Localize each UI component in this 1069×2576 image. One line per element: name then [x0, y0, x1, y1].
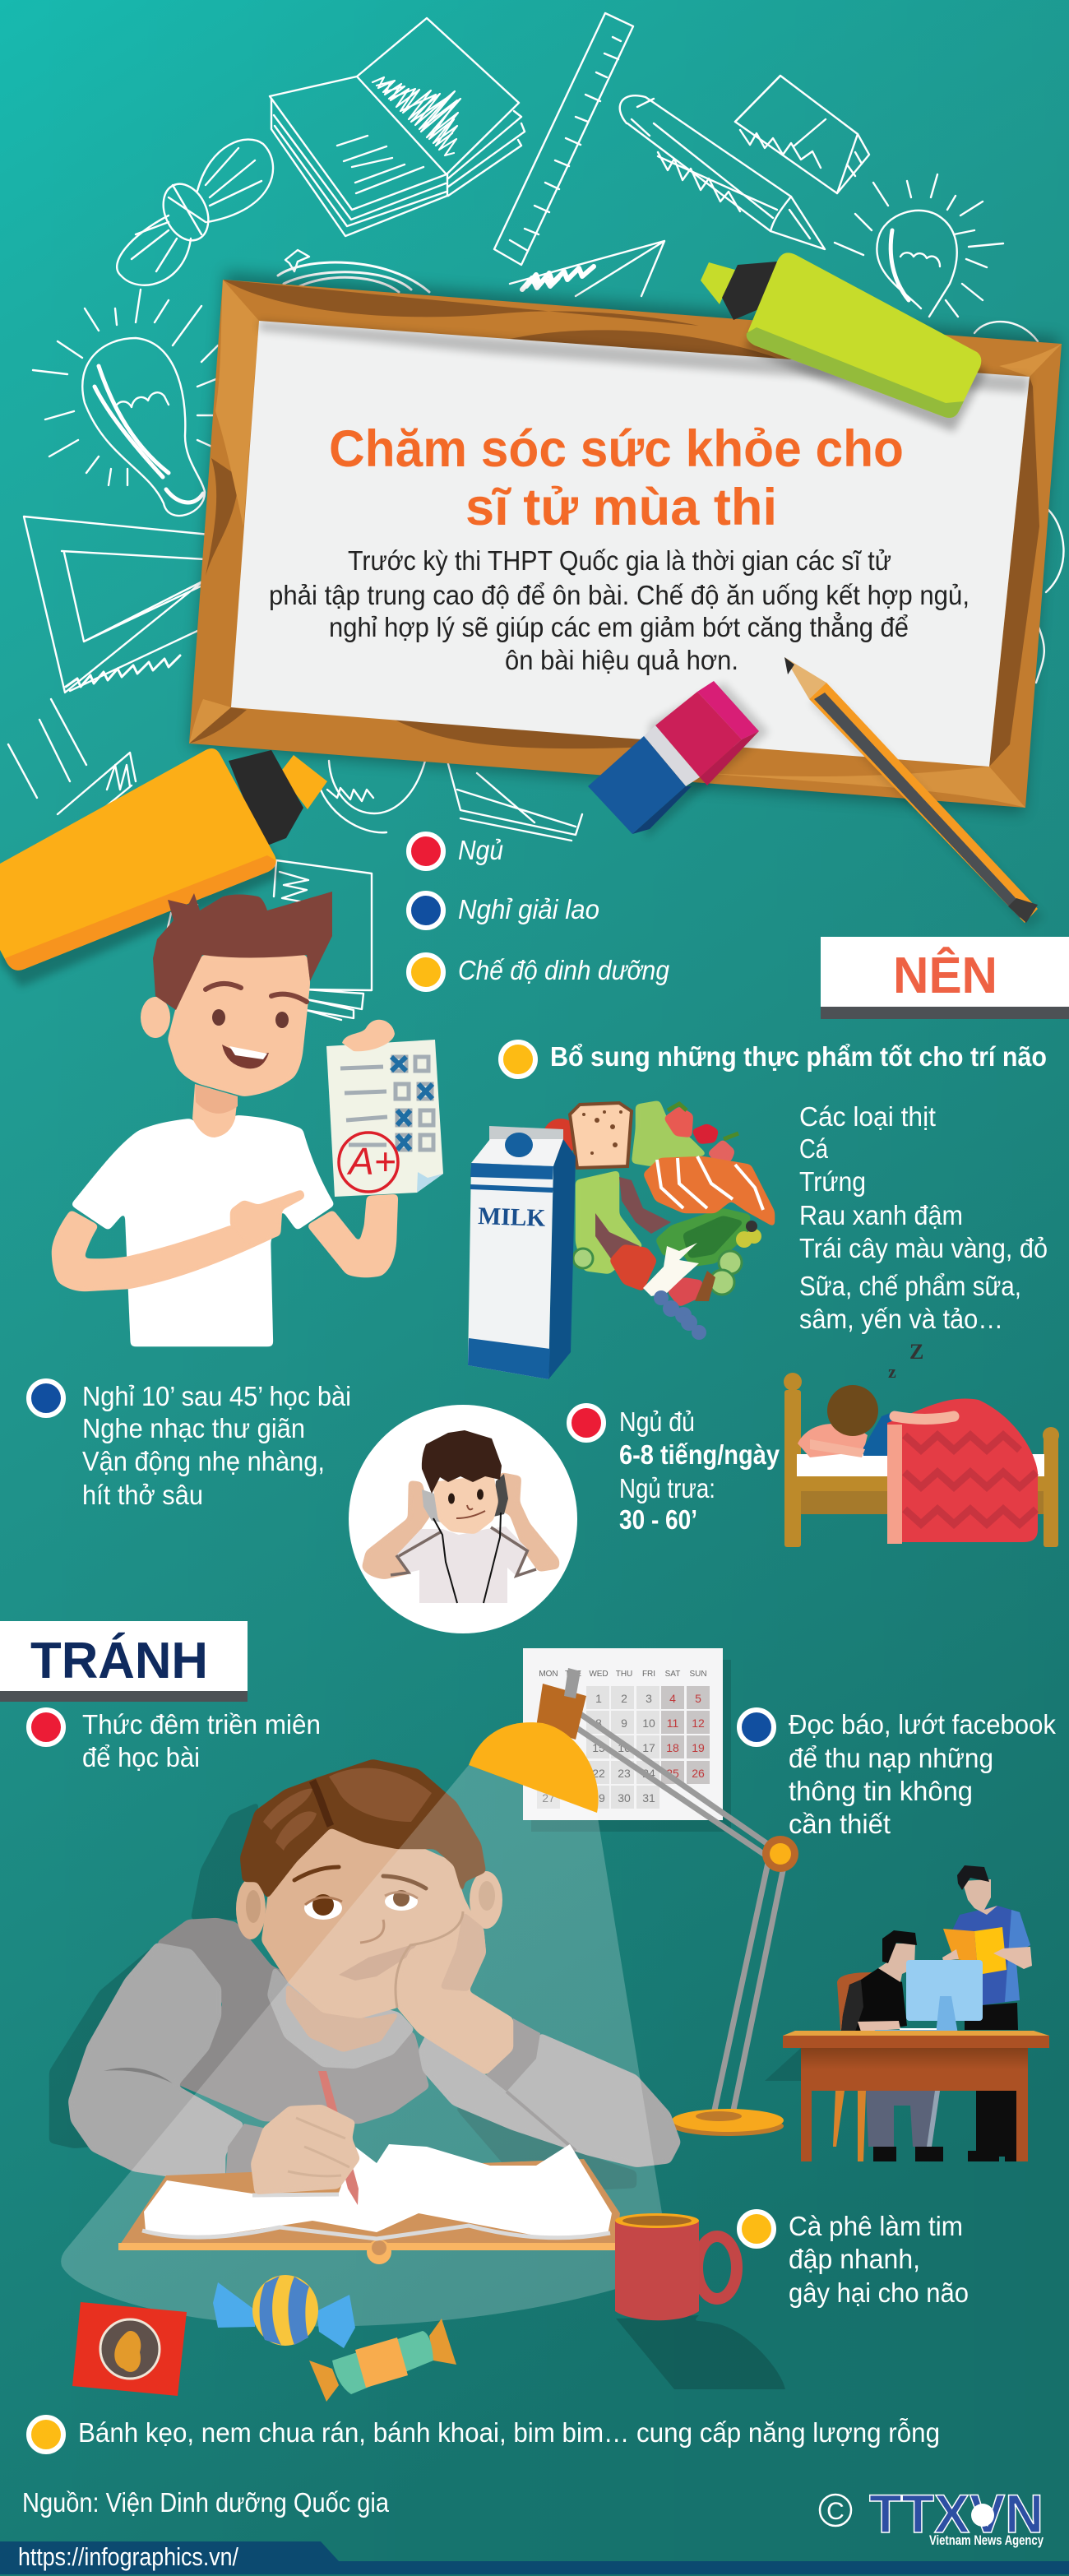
legend	[409, 834, 670, 989]
blueberries	[654, 1290, 706, 1340]
calendar: 2	[621, 1692, 627, 1705]
empty-energy dot	[29, 2417, 63, 2452]
sleep text: Ngủ đủ	[619, 1406, 695, 1437]
doodle: set square	[24, 517, 210, 693]
bread	[570, 1103, 632, 1168]
ears	[236, 1879, 266, 1939]
heading: NÊN	[821, 937, 1069, 1019]
light cone	[61, 1765, 662, 2327]
legend dot: nutrition	[409, 955, 443, 989]
hair	[422, 1430, 502, 1494]
intro text	[269, 545, 970, 675]
right arm	[419, 2033, 681, 2167]
test paper	[326, 1040, 443, 1197]
board	[231, 321, 1030, 767]
face	[261, 1818, 486, 2018]
mattress	[797, 1454, 1044, 1476]
right cuff	[486, 2018, 540, 2092]
doodle: ruler	[494, 13, 633, 265]
calendar: FRI	[642, 1670, 655, 1679]
all-nighter dot	[29, 1710, 63, 1744]
calendar: 18	[666, 1741, 679, 1754]
pillow	[798, 1424, 868, 1457]
mouth	[339, 1943, 419, 1981]
wooden frame	[189, 280, 1062, 808]
illustration: tired student	[49, 1759, 681, 2264]
legend dot: sleep	[409, 834, 443, 869]
coffee text	[789, 2211, 969, 2308]
z large: Z	[909, 1340, 923, 1364]
desk book cover	[118, 2159, 620, 2247]
illustration: sleeping student in bed	[784, 1361, 1059, 1547]
doodle: lower left doodles	[8, 699, 425, 832]
coffee text: gây hại cho não	[789, 2277, 969, 2308]
calendar: 10	[642, 1717, 655, 1730]
nutrition dot	[501, 1042, 535, 1077]
intro text: ôn bài hiệu quả hơn.	[505, 645, 738, 675]
coffee text: đập nhanh,	[789, 2244, 920, 2274]
sleep dot	[569, 1406, 604, 1440]
intro text: Trước kỳ thi THPT Quốc gia là thời gian các sĩ tử	[348, 545, 891, 576]
lower arm	[810, 1439, 865, 1457]
calendar: 4	[669, 1692, 676, 1705]
brows	[294, 1867, 426, 1888]
illustration: food heap	[543, 1100, 775, 1340]
all-nighter text	[82, 1709, 321, 1772]
title: sĩ tử mùa thi	[465, 479, 777, 536]
empty-energy text: Bánh kẹo, nem chua rán, bánh khoai, bim bim… cung cấp năng lượng rỗng	[78, 2417, 940, 2448]
neck	[286, 1983, 400, 2052]
calendar: 25	[666, 1767, 679, 1780]
sleep text: 30 - 60’	[619, 1504, 697, 1535]
sleep text	[619, 1406, 780, 1535]
legend label: rest: Nghỉ giải lao	[458, 894, 599, 924]
legend label: sleep: Ngủ	[458, 835, 503, 865]
vegetables	[655, 1208, 751, 1267]
rest text: Vận động nhẹ nhàng,	[82, 1446, 325, 1476]
doodle: triangle	[510, 241, 664, 296]
sleep text: 6-8 tiếng/ngày	[619, 1439, 780, 1470]
calendar: 15	[592, 1741, 605, 1754]
pointing hand	[230, 1189, 305, 1246]
grade stamp	[339, 1133, 398, 1192]
title: Chăm sóc sức khỏe cho	[329, 420, 904, 478]
board shadow	[259, 321, 1030, 393]
calendar: 16	[618, 1741, 631, 1754]
left arm	[52, 1210, 280, 1291]
mug shadow	[616, 2315, 785, 2389]
calendar: 9	[621, 1717, 627, 1730]
reading dot	[739, 1710, 774, 1744]
nuts	[695, 1271, 715, 1301]
hair	[153, 892, 332, 1010]
all-nighter text: để học bài	[82, 1742, 200, 1772]
olives	[736, 1221, 761, 1248]
face	[433, 1475, 498, 1534]
head	[168, 955, 310, 1096]
frame shadow	[189, 271, 1060, 813]
desk	[783, 2031, 1049, 2036]
blanket	[887, 1399, 1038, 1542]
calendar: 8	[595, 1717, 602, 1730]
rest text: Nghe nhạc thư giãn	[82, 1413, 305, 1443]
calendar: MON	[539, 1670, 558, 1679]
icon: eraser	[588, 681, 769, 839]
doodle: exam sheets behind boy	[161, 860, 372, 1020]
calendar: 17	[642, 1741, 655, 1754]
mouth	[222, 1045, 269, 1068]
icon: coffee mug	[615, 2213, 785, 2389]
icon: striped candy	[213, 2275, 355, 2348]
white radish	[643, 1243, 699, 1296]
apple	[543, 1119, 579, 1155]
torso	[863, 1411, 900, 1456]
desk shadow	[765, 2048, 801, 2081]
icon: wrapped candy	[309, 2319, 456, 2402]
food list: Sữa, chế phẩm sữa,	[799, 1271, 1021, 1301]
seated man: trousers	[866, 2091, 940, 2147]
logo: TTXVN: C	[826, 2498, 845, 2525]
calendar: 22	[592, 1767, 605, 1780]
sleep text: Ngủ trưa:	[619, 1473, 715, 1503]
illustration: happy student: A+	[346, 1140, 396, 1183]
calendar: 1	[595, 1692, 602, 1705]
rest text	[82, 1381, 351, 1510]
seated man: torso	[841, 1968, 907, 2032]
calendar: 30	[618, 1791, 631, 1805]
calendar: 12	[692, 1717, 705, 1730]
mug body	[615, 2221, 699, 2320]
legend label: nutrition: Chế độ dinh dưỡng	[458, 955, 670, 985]
coffee dot	[739, 2212, 774, 2246]
doodle: eraser	[735, 76, 869, 193]
standing man: trousers	[965, 2003, 1018, 2157]
doodle: book	[270, 18, 525, 236]
calendar	[523, 1648, 731, 1832]
calendar: THU	[616, 1670, 632, 1679]
calendar: 11	[667, 1717, 678, 1730]
logo: TTXVN: TTXVN	[869, 2483, 1044, 2544]
reading text	[789, 1709, 1056, 1839]
food list: sâm, yến và tảo…	[799, 1304, 1003, 1334]
food list: Trứng	[799, 1166, 866, 1197]
coffee text: Cà phê làm tim	[789, 2211, 963, 2241]
food list: Các loại thịt	[799, 1101, 936, 1132]
hand on cheek	[393, 1911, 513, 2075]
rest dot	[29, 1381, 63, 1415]
illustration: child with headphones	[349, 1405, 577, 1633]
rail	[801, 1476, 1044, 1514]
reading text: thông tin không	[789, 1776, 973, 1806]
doodles: chalk school items	[8, 13, 1063, 1020]
nose	[360, 1920, 384, 1943]
strawberries	[664, 1106, 693, 1137]
frame light edge	[189, 280, 1062, 808]
calendar: TUE	[565, 1670, 581, 1679]
doodle: compass	[278, 250, 429, 292]
upper arm	[895, 1416, 954, 1419]
lamp head	[469, 1668, 599, 1813]
heading: NÊN: NÊN	[893, 947, 997, 1004]
calendar: 3	[646, 1692, 652, 1705]
salmon	[643, 1156, 775, 1227]
fingers	[342, 1020, 395, 1051]
doodle: bow	[117, 140, 273, 285]
illustration: people at computer	[765, 1865, 1049, 2161]
reading text: để thu nạp những	[789, 1743, 993, 1773]
sleeve seams	[391, 1527, 536, 1576]
neck	[192, 1084, 238, 1137]
ear	[141, 997, 170, 1038]
calendar: 5	[695, 1692, 701, 1705]
doodle: light bulb right	[835, 174, 1038, 341]
source: Nguồn: Viện Dinh dưỡng Quốc gia	[22, 2487, 390, 2518]
arms	[362, 1480, 431, 1579]
doodle: paper stack behind frame	[447, 761, 582, 841]
calendar: 27	[542, 1791, 555, 1805]
footer band: https://infographics.vn/	[18, 2542, 238, 2571]
milk label: MILK	[478, 1202, 547, 1232]
eyes	[212, 1009, 225, 1026]
icon: orange highlighter	[0, 748, 327, 987]
right arm	[307, 1194, 398, 1277]
icon: snack bag	[72, 2302, 187, 2396]
frame dark waves	[189, 280, 1039, 767]
icon: green highlighter	[701, 253, 987, 432]
collar	[267, 1966, 414, 2069]
seated man: head	[878, 1944, 915, 1982]
all-nighter text: Thức đêm triền miên	[82, 1709, 321, 1740]
standing man: head	[962, 1879, 997, 1915]
book pages	[144, 2147, 377, 2239]
mug handle	[697, 2236, 737, 2299]
frame wood	[189, 280, 1062, 808]
cables	[433, 1513, 501, 1603]
icon: milk carton	[468, 1126, 576, 1379]
intro text: phải tập trung cao độ để ôn bài. Chế độ ăn uống kết hợp ngủ,	[269, 580, 970, 610]
calendar: 19	[692, 1741, 705, 1754]
calendar: WED	[589, 1670, 609, 1679]
reading text: cần thiết	[789, 1809, 891, 1839]
pencil	[318, 2071, 359, 2205]
icon: pencil	[784, 657, 1044, 929]
eyes	[304, 1897, 342, 1920]
illustration: happy student	[52, 892, 443, 1346]
shirt	[396, 1527, 528, 1603]
head	[827, 1385, 878, 1436]
legend dot: rest	[409, 893, 443, 928]
hair	[240, 1759, 486, 1899]
chair	[837, 1972, 872, 2030]
shirt	[71, 1115, 335, 1346]
rest text: Nghỉ 10’ sau 45’ học bài	[82, 1381, 351, 1411]
monitor	[906, 1960, 983, 2021]
left cuff	[225, 2124, 263, 2189]
tomato	[609, 1244, 657, 1291]
heading: TRÁNH	[0, 1621, 248, 1702]
open book	[943, 1929, 977, 1962]
calendar: 24	[642, 1767, 655, 1780]
bed posts	[784, 1373, 1059, 1547]
cucumbers	[573, 1249, 742, 1295]
calendar: SAT	[665, 1670, 680, 1679]
reading text: Đọc báo, lướt facebook	[789, 1709, 1056, 1740]
lettuce	[632, 1100, 707, 1166]
meat	[595, 1177, 671, 1260]
lamp arm and base	[576, 1711, 798, 2136]
food list	[799, 1101, 1048, 1334]
z letters: z	[888, 1361, 896, 1382]
calendar: SUN	[689, 1670, 707, 1679]
hair highlights	[263, 1768, 432, 1851]
brows	[206, 984, 307, 1002]
torso	[156, 1918, 429, 2124]
doodle: light bulb left	[33, 290, 218, 516]
doodle: pencil	[620, 95, 825, 249]
food list: Rau xanh đậm	[799, 1200, 963, 1230]
heading: TRÁNH: TRÁNH	[30, 1633, 208, 1689]
calendar: 23	[618, 1767, 631, 1780]
blanket fold	[887, 1425, 902, 1544]
rest text: hít thở sâu	[82, 1480, 203, 1510]
calendar: 26	[692, 1767, 705, 1780]
calendar: 29	[592, 1791, 605, 1805]
food list: Cá	[799, 1133, 829, 1164]
calendar: 31	[642, 1791, 655, 1805]
title	[329, 420, 904, 536]
writing hand	[251, 2105, 360, 2194]
footer band	[0, 2541, 1069, 2574]
food list: Trái cây màu vàng, đỏ	[799, 1233, 1048, 1263]
headphones	[422, 1490, 442, 1522]
left arm	[68, 1943, 244, 2185]
intro text: nghỉ hợp lý sẽ giúp các em giảm bớt căng thẳng để	[329, 612, 909, 642]
shadow	[49, 1802, 636, 2192]
features	[448, 1489, 485, 1518]
doodle: right edge	[1036, 510, 1063, 683]
standing man: shirt	[952, 1906, 1030, 2005]
